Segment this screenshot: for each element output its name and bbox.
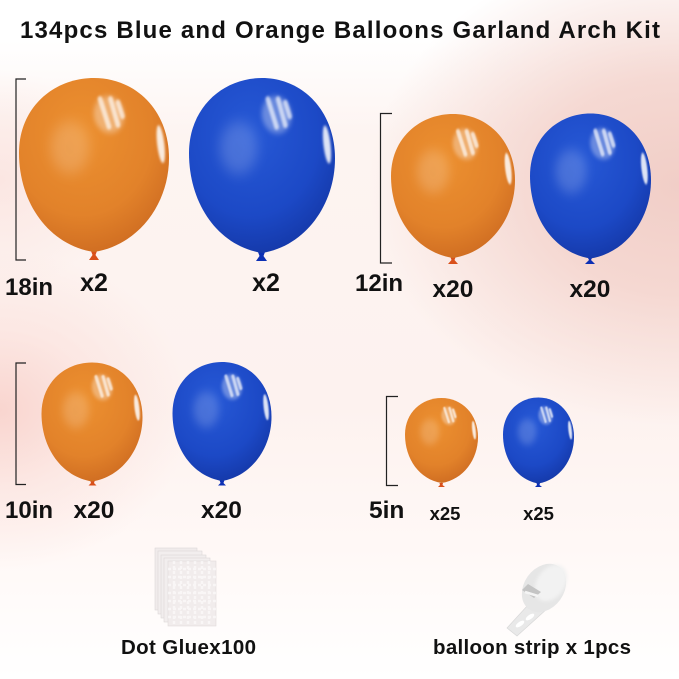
group: 18in balloons [5, 78, 335, 301]
quantity: orange 12in: x20 [433, 276, 473, 303]
title: 134pcs Blue and Orange Balloons Garland Arch Kit [20, 17, 660, 44]
label: dot glue: Dot Gluex100 [121, 636, 256, 659]
size bracket: 10in [16, 363, 26, 484]
label: 5in: 5in [369, 497, 404, 524]
group: 12in balloons [355, 114, 651, 303]
blue balloon 12in [530, 114, 651, 264]
icon: balloon strip roll [507, 555, 575, 636]
quantity: blue 12in: x20 [570, 276, 610, 303]
orange balloon 12in [391, 114, 515, 264]
label: 12in: 12in [355, 270, 403, 297]
orange balloon 5in [405, 398, 478, 487]
quantity: orange 10in: x20 [74, 497, 114, 524]
quantity: blue 10in: x20 [201, 497, 242, 524]
group: 10in balloons [5, 362, 272, 524]
orange balloon 10in [42, 362, 142, 486]
blue balloon 5in [503, 398, 574, 487]
group: 5in balloons [369, 396, 574, 524]
size bracket: 5in [386, 396, 398, 486]
blue balloon 10in [172, 362, 272, 486]
quantity: blue 18in: x2 [252, 269, 280, 297]
label: 18in: 18in [5, 274, 53, 301]
blue balloon 18in [189, 78, 335, 261]
size bracket: 18in [16, 79, 26, 260]
orange balloon 18in [19, 78, 169, 260]
icon: dot glue sheets [155, 548, 216, 626]
size bracket: 12in [380, 114, 392, 263]
quantity: orange 18in: x2 [80, 269, 108, 297]
label: balloon strip: balloon strip x 1pcs [433, 636, 631, 659]
quantity: orange 5in: x25 [430, 503, 460, 524]
quantity: blue 5in: x25 [523, 503, 554, 524]
label: 10in: 10in [5, 497, 53, 524]
